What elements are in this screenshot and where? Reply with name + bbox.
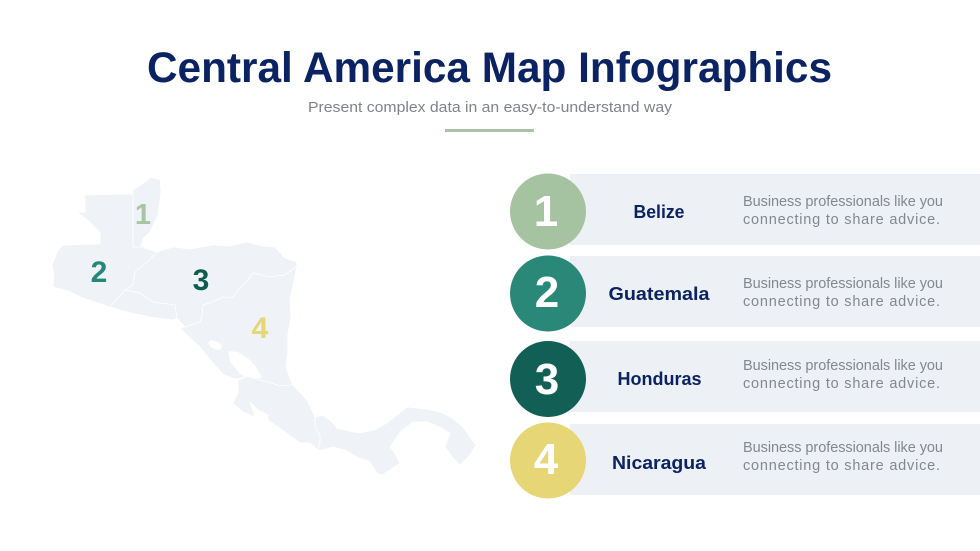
row: Belize	[510, 174, 980, 250]
country name: Belize	[634, 202, 684, 222]
row: Nicaragua: 4	[534, 435, 559, 484]
map: Central America	[52, 177, 476, 475]
description: connecting to share advice.	[743, 458, 940, 474]
map region: Honduras	[125, 242, 297, 327]
map feature: Lake Managua	[207, 338, 223, 352]
description: Business professionals like you	[743, 194, 943, 210]
row band	[570, 424, 980, 495]
map region: Panama	[315, 407, 476, 475]
row: Honduras: 3	[535, 355, 559, 404]
row: Guatemala	[510, 256, 980, 332]
row band	[570, 174, 980, 245]
map label: 4: 4	[252, 312, 269, 345]
map region: Guatemala	[52, 194, 157, 307]
map label: 3: 3	[193, 264, 209, 297]
subtitle: Present complex data in an easy-to-understand way	[308, 99, 673, 116]
number badge 4	[510, 422, 586, 498]
map label: 1: 1	[135, 199, 151, 231]
map region: Belize	[133, 177, 161, 247]
number badge 1	[510, 174, 586, 250]
row: Honduras	[510, 341, 980, 417]
row: Belize: 1	[534, 187, 558, 236]
description: Business professionals like you	[743, 440, 943, 456]
row band	[570, 341, 980, 412]
description: connecting to share advice.	[743, 376, 940, 392]
title: Central America Map Infographics	[147, 44, 832, 92]
row band	[570, 256, 980, 327]
country name: Nicaragua	[612, 453, 707, 473]
map region: El Salvador	[110, 290, 177, 320]
description: connecting to share advice.	[743, 212, 940, 228]
number badge 3	[510, 341, 586, 417]
description: connecting to share advice.	[743, 294, 940, 310]
map region: Nicaragua	[180, 266, 297, 386]
row: Guatemala: 2	[535, 268, 559, 317]
number badge 2	[510, 256, 586, 332]
map feature: Lake Nicaragua	[228, 351, 262, 379]
description: Business professionals like you	[743, 276, 943, 292]
row: Nicaragua	[510, 422, 980, 498]
country name: Guatemala	[608, 284, 711, 304]
title underline	[445, 129, 534, 132]
country name: Honduras	[618, 369, 702, 389]
map label: 2: 2	[91, 256, 107, 289]
map region: Costa Rica	[233, 376, 320, 450]
description: Business professionals like you	[743, 358, 943, 374]
